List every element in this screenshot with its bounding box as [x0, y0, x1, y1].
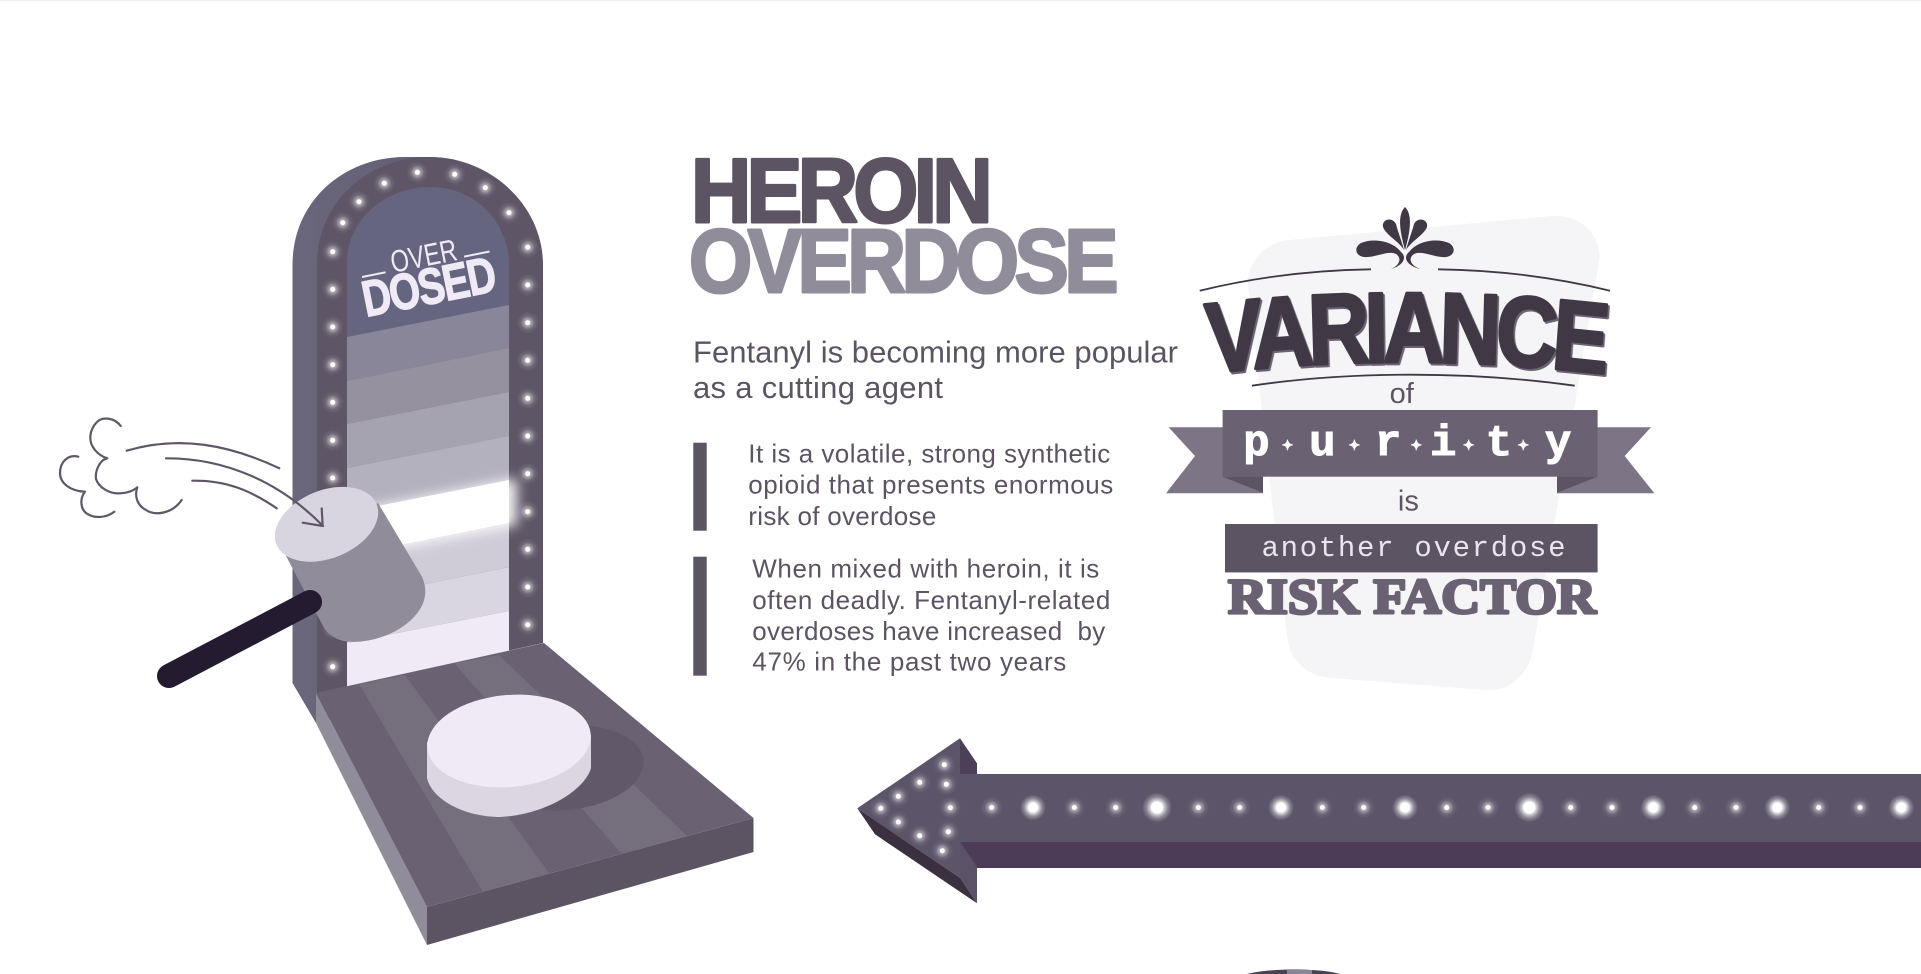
puck shadow	[484, 718, 648, 818]
ribbon text: purity: r	[1375, 419, 1401, 469]
arrow head extrusion	[960, 738, 977, 775]
risk factor: RISK FACTOR	[1228, 568, 1597, 624]
arrow lights	[870, 754, 1914, 862]
marquee lights: tower	[322, 161, 539, 678]
bullet text 2: overdoses have increased by	[752, 616, 1105, 646]
ribbon text: purity: t	[1486, 419, 1512, 469]
bullet text 2: often deadly. Fentanyl-related	[752, 585, 1110, 615]
intro text	[693, 335, 1178, 405]
title line: overdose: OVERDOSE	[689, 212, 1116, 312]
word: is: is	[1398, 486, 1419, 518]
tower front frame	[317, 157, 543, 693]
tower side wall	[292, 157, 430, 723]
dark box: another overdose	[1225, 524, 1598, 573]
word: of: of	[1390, 378, 1415, 410]
bullet text 1: risk of overdose	[748, 501, 936, 531]
dark box: another overdose: another overdose	[1262, 532, 1566, 565]
mallet	[169, 473, 425, 676]
ribbon text: purity: y	[1545, 419, 1571, 469]
arrow sign	[857, 738, 1921, 903]
puck target	[423, 688, 595, 817]
bullet text 2: 47% in the past two years	[752, 647, 1066, 677]
ornament	[1356, 207, 1454, 269]
variance wordmark: VARIANCE	[1202, 292, 1610, 377]
sign: over dosed: DOSED	[357, 246, 500, 328]
next section dome peek	[1247, 970, 1340, 974]
motion cloud and arrow lines	[60, 419, 323, 526]
bullet text 2	[752, 554, 1110, 677]
sign: over dosed: OVER	[387, 232, 460, 280]
bullet bar 1	[693, 443, 707, 531]
intro text: as a cutting agent	[693, 370, 943, 405]
arcs	[1200, 269, 1610, 386]
ribbon text: purity: i	[1430, 419, 1456, 469]
ribbon text: purity: ✦	[1282, 438, 1294, 454]
base board	[316, 643, 754, 945]
white band glow	[347, 478, 517, 558]
title	[689, 141, 1116, 312]
ribbon text: purity: p	[1243, 419, 1270, 469]
bullet bar 2	[693, 557, 707, 676]
bullet text 2: When mixed with heroin, it is	[752, 554, 1099, 584]
title line: heroin: HEROIN	[691, 141, 988, 242]
tower score panel	[347, 187, 509, 686]
bullet text 1: It is a volatile, strong synthetic	[748, 438, 1110, 468]
bullet text 1	[748, 438, 1113, 531]
ribbon text: purity: ✦	[1410, 438, 1422, 454]
ribbon text: purity: ✦	[1349, 438, 1361, 454]
badge: variance of purity	[1166, 207, 1654, 690]
bullet text 1: opioid that presents enormous	[748, 469, 1113, 499]
ribbon text: purity: ✦	[1463, 438, 1475, 454]
arrow face	[857, 738, 1921, 878]
arrow shaft underside	[960, 842, 1921, 868]
ribbon text: purity: ✦	[1517, 438, 1529, 454]
badge background blob	[1248, 216, 1600, 690]
variance wordmark	[1202, 292, 1610, 377]
intro text: Fentanyl is becoming more popular	[693, 335, 1178, 370]
ribbon	[1166, 410, 1654, 493]
illustration: high striker game	[60, 157, 754, 945]
ribbon text: purity: u	[1309, 419, 1336, 469]
